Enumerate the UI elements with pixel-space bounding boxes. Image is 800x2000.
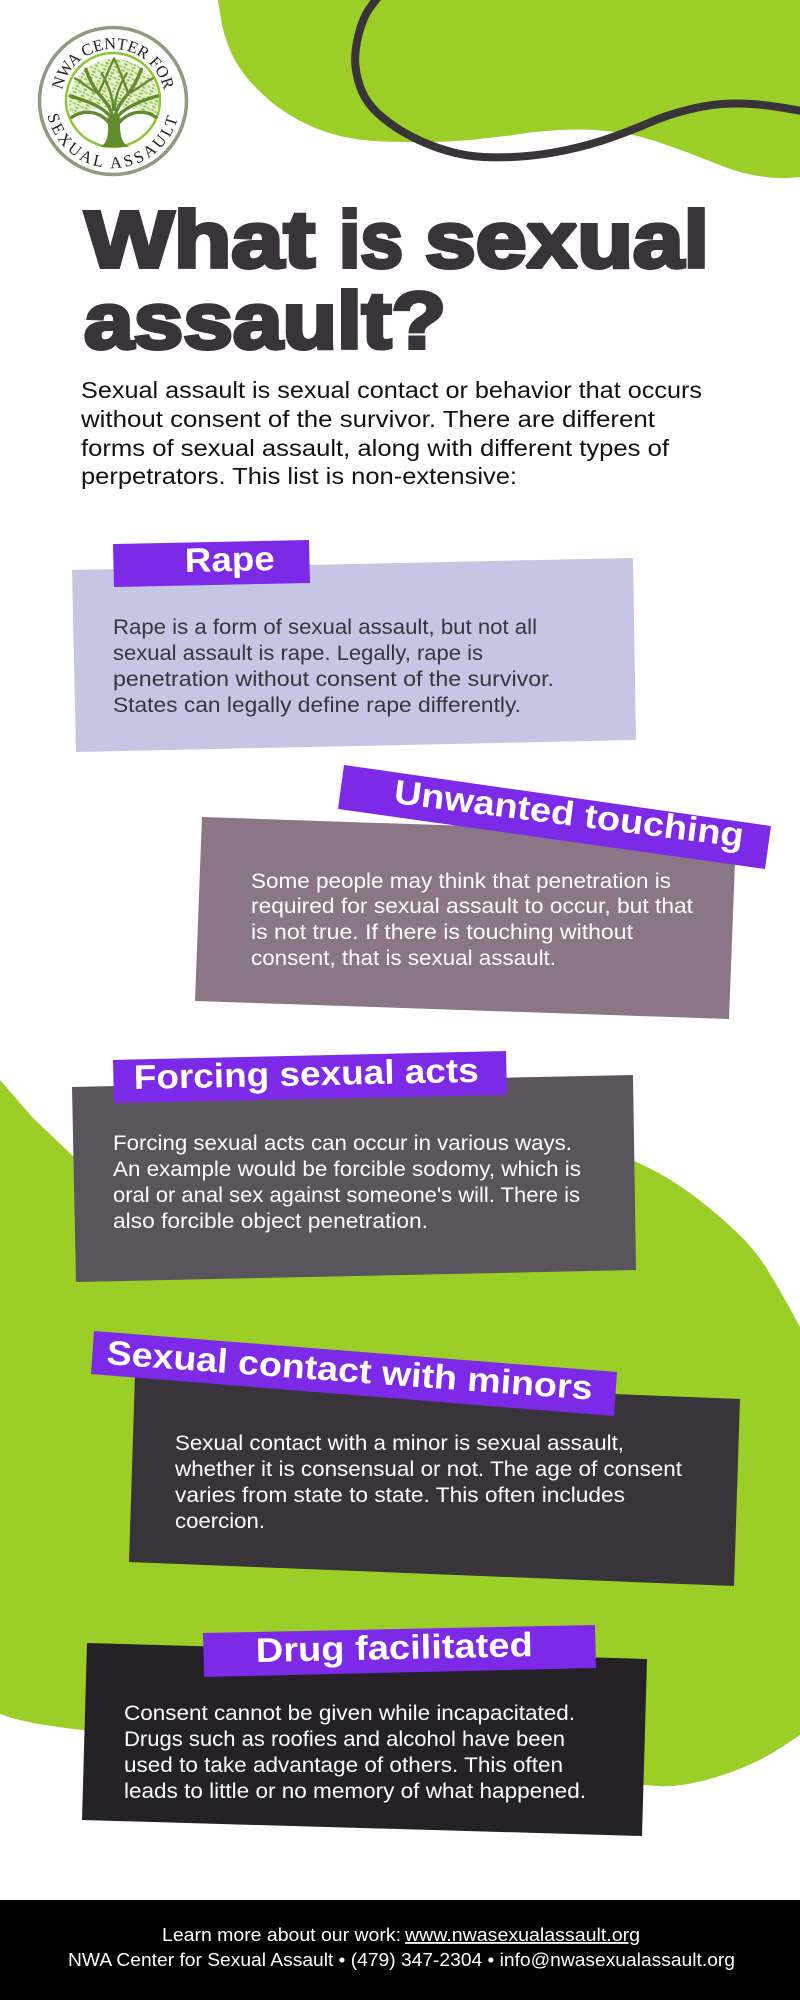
sexual contact with minors heading tag: Sexual contact with minors xyxy=(105,1334,594,1408)
unwanted touching heading tag xyxy=(338,765,771,869)
panel: forcing sexual acts xyxy=(72,1051,636,1282)
intro text: perpetrators. This list is non-extensive: xyxy=(81,463,517,489)
drug facilitated heading tag: Drug facilitated xyxy=(255,1626,533,1670)
drug facilitated body text: used to take advantage of others. This often xyxy=(124,1754,563,1777)
intro text: without consent of the survivor. There are different xyxy=(80,406,656,432)
green blob: lower background xyxy=(0,1080,800,1786)
forcing sexual acts body text: Forcing sexual acts can occur in various ways. xyxy=(113,1132,572,1155)
title: is xyxy=(339,195,403,284)
logo: NWA Center for Sexual Assault xyxy=(38,26,188,176)
rape heading tag: Rape xyxy=(184,540,275,580)
logo text top: NWA CENTER FOR xyxy=(52,38,173,90)
panel: drug facilitated xyxy=(82,1625,647,1836)
rape body text: sexual assault is rape. Legally, rape is xyxy=(113,642,483,665)
unwanted touching body text: Some people may think that penetration is xyxy=(251,870,671,893)
footer text: NWA Center for Sexual Assault • (479) 347-2304 • info@nwasexualassault.org xyxy=(68,1949,735,1970)
footer text: www.nwasexualassault.org xyxy=(404,1924,640,1945)
sexual contact with minors body text: whether it is consensual or not. The age of consent xyxy=(174,1458,682,1481)
logo tree xyxy=(69,59,159,147)
sexual contact with minors body text: Sexual contact with a minor is sexual assault, xyxy=(175,1432,624,1455)
forcing sexual acts body text xyxy=(113,1132,581,1233)
curved dark line xyxy=(355,0,800,157)
unwanted touching body text xyxy=(251,870,693,970)
drug facilitated body text: Drugs such as roofies and alcohol have been xyxy=(124,1728,565,1751)
footer text xyxy=(68,1924,735,1970)
title: What xyxy=(85,195,315,284)
rape body text: States can legally define rape differently. xyxy=(113,694,521,717)
unwanted touching body text: required for sexual assault to occur, but that xyxy=(251,895,693,918)
green blob: top right xyxy=(218,0,800,178)
drug facilitated body text xyxy=(124,1702,586,1803)
footer xyxy=(0,1900,800,2000)
forcing sexual acts body text: also forcible object penetration. xyxy=(113,1210,428,1233)
panel: unwanted touching xyxy=(195,765,771,1019)
rape body text: Rape is a form of sexual assault, but not all xyxy=(113,616,537,639)
title: assault? xyxy=(84,276,446,365)
panel: sexual contact with minors xyxy=(91,1331,740,1586)
panel: rape xyxy=(72,540,636,752)
forcing sexual acts body text: An example would be forcible sodomy, which is xyxy=(113,1158,581,1181)
sexual contact with minors body text: coercion. xyxy=(175,1510,265,1533)
title: sexual xyxy=(425,195,709,284)
rape heading tag xyxy=(113,540,310,587)
drug facilitated body text: Consent cannot be given while incapacitated. xyxy=(124,1702,575,1725)
forcing sexual acts heading tag: Forcing sexual acts xyxy=(133,1052,479,1097)
rape body text xyxy=(113,616,554,717)
rape body text: penetration without consent of the survivor. xyxy=(113,668,554,691)
sexual contact with minors heading tag xyxy=(91,1331,617,1416)
drug facilitated body text: leads to little or no memory of what happened. xyxy=(124,1780,586,1803)
sexual contact with minors body text xyxy=(174,1432,682,1533)
forcing sexual acts body text: oral or anal sex against someone's will. There is xyxy=(113,1184,580,1207)
drug facilitated heading tag xyxy=(203,1625,596,1677)
unwanted touching heading tag: Unwanted touching xyxy=(392,773,746,855)
intro text xyxy=(80,377,702,489)
logo text bottom: SEXUAL ASSAULT xyxy=(48,114,177,168)
intro text: forms of sexual assault, along with different types of xyxy=(81,435,670,461)
title xyxy=(84,195,709,365)
sexual contact with minors body text: varies from state to state. This often includes xyxy=(175,1484,625,1507)
forcing sexual acts heading tag xyxy=(113,1051,507,1103)
intro text: Sexual assault is sexual contact or behavior that occurs xyxy=(81,377,702,403)
unwanted touching body text: consent, that is sexual assault. xyxy=(251,947,556,970)
unwanted touching body text: is not true. If there is touching without xyxy=(251,921,633,944)
footer text: Learn more about our work: xyxy=(162,1924,401,1945)
